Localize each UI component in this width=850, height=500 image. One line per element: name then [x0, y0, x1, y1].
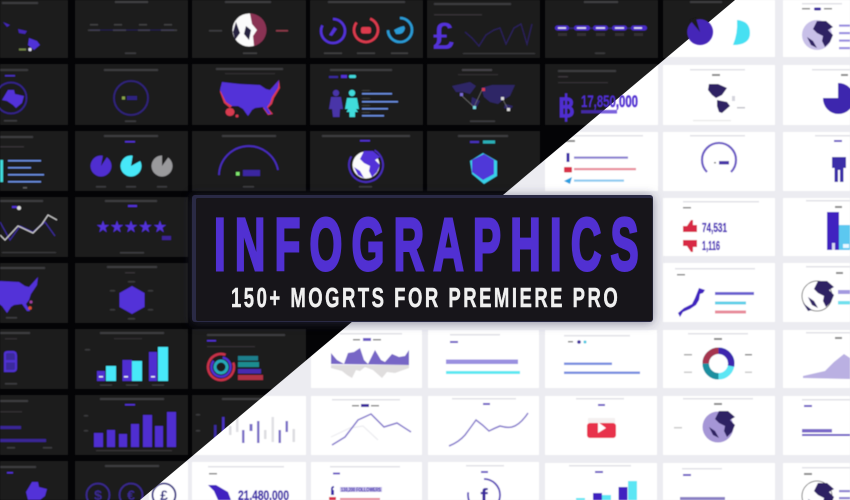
- panel: dark line chart: [0, 197, 68, 257]
- panel: single line chart: [428, 396, 539, 455]
- panel: timeline: [75, 0, 188, 58]
- panel: pound line chart: [427, 0, 540, 58]
- panel: USA map: [192, 64, 306, 125]
- panel: bar light: [663, 463, 775, 500]
- panel: dark pies: [663, 0, 776, 58]
- panel: world map: [427, 64, 540, 125]
- panel: lavender globe: [663, 396, 775, 455]
- panel: area chart: [311, 330, 422, 388]
- panel: social followers: [311, 462, 422, 500]
- subheading: 150+ MOGRTS FOR PREMIERE PRO: [231, 283, 618, 314]
- panel: YouTube icon: [545, 396, 657, 455]
- panel: cyan person bars: [0, 131, 68, 191]
- panel: paired bars light: [545, 463, 657, 500]
- panel: thumbs rating: 74,531: [702, 220, 727, 235]
- panel: social rings: [310, 0, 423, 58]
- panel: candlestick dark: [192, 395, 306, 455]
- panel: Hawaii map: [0, 0, 68, 58]
- title box: [192, 195, 653, 322]
- panel: mountain area chart: [783, 330, 850, 388]
- heading: INFOGRAPHICS: INFOGRAPHICS: [214, 202, 639, 286]
- icon: pound symbol: £: [433, 16, 454, 58]
- panel: blue bars: [545, 330, 657, 388]
- panel: big pie right: [783, 65, 850, 125]
- panel: figure light side: [586, 65, 658, 125]
- panel: cryptocurrency figure: [545, 64, 658, 125]
- panel: star rating: [75, 197, 188, 257]
- panel: red globe: [192, 0, 306, 58]
- panel: dashed bars: [428, 330, 539, 388]
- panel: USA purple: [0, 263, 68, 323]
- panel: pound ring: [149, 462, 188, 500]
- elements straddling the diagonal: [433, 16, 713, 124]
- panel: Americas globe: [663, 65, 775, 125]
- panel: Facebook ring: [428, 462, 539, 500]
- panel: light pie: [663, 0, 775, 57]
- panel: male female bars: [310, 64, 423, 125]
- panel: thumbs rating: 1,116: [702, 238, 720, 253]
- panel: purple bars: [75, 395, 188, 455]
- panel: pill timeline: [545, 0, 658, 58]
- panel: Texas ring: [0, 64, 68, 125]
- big number 17,850,000: ฿: [558, 91, 575, 124]
- big number 17,850,000: 17,850,000: [581, 93, 638, 111]
- panel: globe with bars: [783, 263, 850, 322]
- panel: line chart two series: [311, 396, 422, 455]
- purple pie chart: [687, 18, 713, 45]
- big number 17,850,000: [558, 91, 638, 124]
- panel: Texas lower: [0, 461, 68, 500]
- panel: Japan map: [663, 263, 775, 322]
- panel: currency symbol: [0, 329, 68, 389]
- panel: currency rings: [75, 461, 188, 500]
- panel: donut chart: [663, 330, 775, 388]
- panel: candlestick light: [192, 396, 306, 455]
- panel: Texas number: [192, 462, 306, 500]
- panel: gauge: [192, 131, 306, 191]
- panel: ringed globe: [310, 131, 423, 191]
- panel: light gauge: [663, 132, 775, 191]
- panel: purple hexagon: [75, 263, 188, 323]
- panel: blue person: [783, 132, 850, 191]
- panel: activity rings: [192, 329, 306, 389]
- panel: horizontal bars: [0, 395, 68, 455]
- panel: social bar chart: [783, 198, 850, 256]
- panel: paired bar chart: [75, 329, 188, 389]
- panel: globe bottom right: [783, 463, 850, 500]
- panel: percent ring: [75, 64, 188, 125]
- panel: share bar: [783, 396, 850, 455]
- panel: three pies: [75, 131, 188, 191]
- panel: social bars: [545, 132, 658, 191]
- panel: radar hexagon: [427, 131, 540, 191]
- panel: social followers: 130,200 FOLLOWERS: [341, 488, 381, 494]
- panel: light globe top right: [783, 0, 850, 57]
- panel: thumbs rating: [663, 198, 775, 256]
